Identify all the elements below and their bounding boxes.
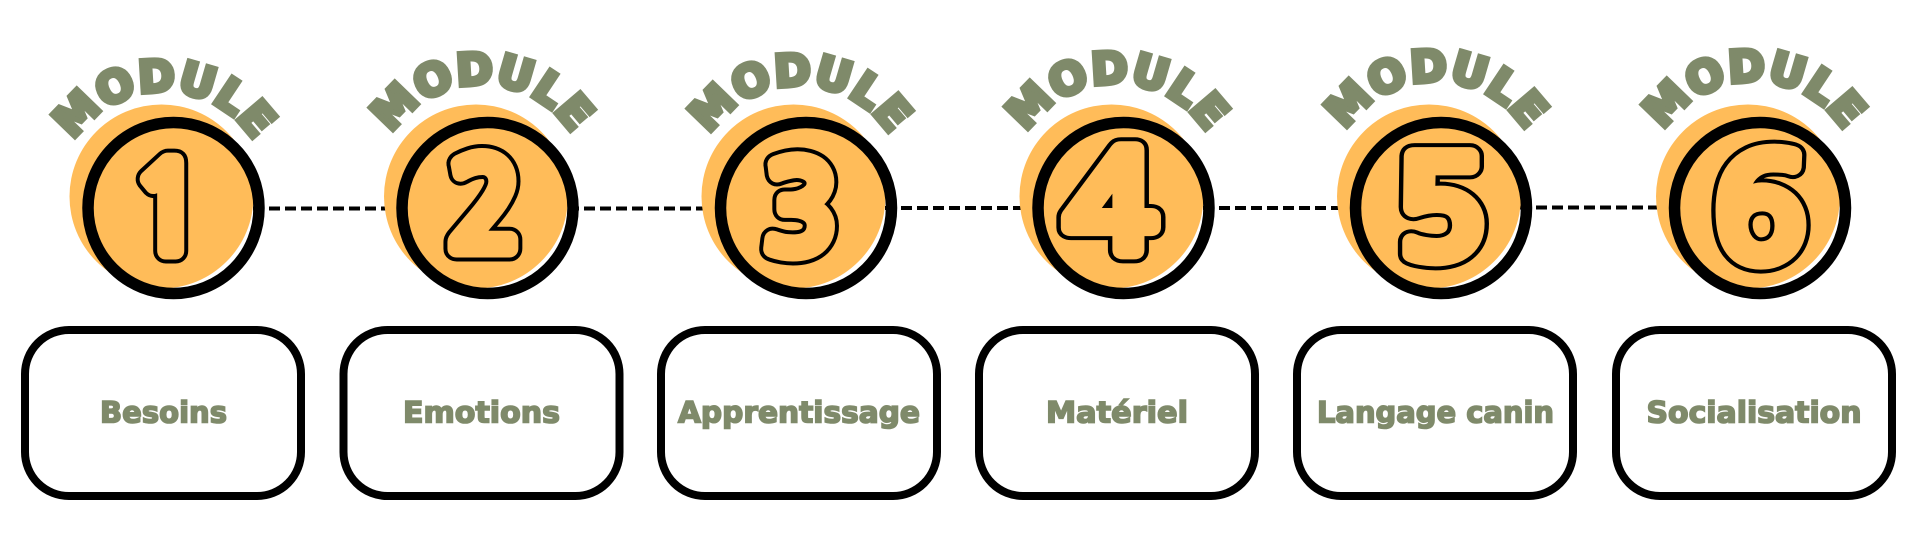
module 2 ring bbox=[402, 122, 573, 294]
module 5 bbox=[1293, 47, 1577, 500]
module 1 orange disc bbox=[70, 104, 254, 288]
module 6 label box bbox=[1616, 330, 1892, 496]
module 4 label box bbox=[979, 330, 1255, 496]
module 2 heading: MODULE bbox=[366, 50, 598, 134]
module 4 number: 4 bbox=[1065, 137, 1157, 273]
module 1 ring bbox=[88, 122, 259, 294]
module 6 label: Socialisation bbox=[1646, 396, 1862, 430]
module 1 heading: MODULE bbox=[48, 57, 280, 142]
module 3 orange disc bbox=[702, 104, 886, 288]
module 5 label: Langage canin bbox=[1317, 396, 1554, 430]
module 3 ring bbox=[720, 122, 892, 294]
module 2 bbox=[340, 50, 624, 500]
module 5 number: 5 bbox=[1395, 144, 1487, 279]
dashed connector line bbox=[253, 208, 1668, 209]
module 4 ring bbox=[1038, 122, 1209, 294]
module 3 bbox=[657, 52, 941, 500]
module 6 ring bbox=[1674, 122, 1846, 294]
module 1 bbox=[21, 57, 305, 500]
module 2 number: 2 bbox=[447, 147, 523, 269]
module 3 number: 3 bbox=[763, 150, 838, 272]
module 5 heading: MODULE bbox=[1320, 47, 1552, 132]
module 4 orange disc bbox=[1020, 104, 1204, 288]
module 5 label box bbox=[1297, 330, 1573, 496]
module 3 label: Apprentissage bbox=[678, 396, 920, 430]
module 4 number: 4 bbox=[1065, 137, 1157, 273]
module 2 label box bbox=[344, 330, 620, 496]
module 2 label: Emotions bbox=[403, 396, 560, 430]
module 3 number: 3 bbox=[763, 150, 838, 272]
module 2 orange disc bbox=[384, 104, 568, 288]
module 1 label: Besoins bbox=[100, 396, 227, 430]
module 1 number: 1 bbox=[131, 150, 205, 271]
module 6 heading: MODULE bbox=[1638, 47, 1870, 132]
module 3 label box bbox=[661, 330, 937, 496]
module 6 bbox=[1612, 47, 1896, 500]
module 3 heading: MODULE bbox=[684, 52, 916, 136]
module 2 number: 2 bbox=[447, 147, 523, 269]
module 5 number: 5 bbox=[1395, 144, 1487, 279]
module 5 orange disc bbox=[1337, 104, 1521, 288]
module 5 ring bbox=[1356, 122, 1526, 294]
module 6 orange disc bbox=[1656, 104, 1840, 288]
module 1 label box bbox=[25, 330, 301, 496]
module 4 label: Matériel bbox=[1046, 396, 1188, 430]
module 4 heading: MODULE bbox=[1002, 49, 1234, 134]
module 1 number: 1 bbox=[131, 150, 205, 271]
module 6 number: 6 bbox=[1713, 141, 1807, 283]
module 4 bbox=[975, 49, 1259, 500]
module 6 number: 6 bbox=[1713, 141, 1807, 283]
